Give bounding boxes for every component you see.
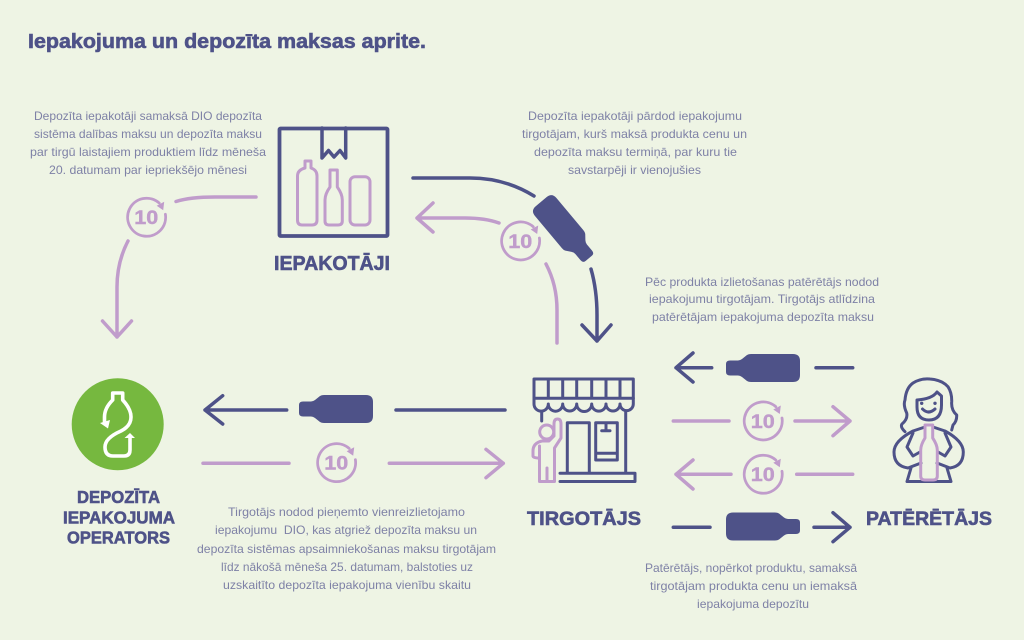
text block: consumer buys product: iepakojuma depozītu [697, 598, 809, 611]
text block: retailer hands packaging to DIO [197, 506, 496, 592]
text block: packers pay DIO: 20. datumam par iepriekšējo mēnesi [49, 164, 247, 177]
icon: retailer shop [533, 379, 635, 482]
icon: DIO green recycle bottle [72, 378, 164, 470]
icon: deposit 10 consumer to retailer: 10 [751, 465, 775, 486]
heading: consumer: PATĒRĒTĀJS [866, 508, 992, 530]
text block: retailer hands packaging to DIO: depozīta sistēmas apsaimniekošanas maksu tirgotājam [197, 543, 496, 556]
text block: consumer returns packaging: Pēc produkta izlietošanas patērētājs nodod [645, 276, 879, 289]
arrow: packers to DIO [102, 197, 256, 337]
text block: retailer hands packaging to DIO: līdz nākošā mēneša 25. datumam, balstoties uz [221, 561, 473, 574]
icon: bottle diagonal [530, 193, 600, 267]
text block: consumer returns packaging: patērētājam iepakojuma depozīta maksu [652, 311, 874, 324]
arrow: deposit from DIO to retailer [203, 449, 503, 478]
icon: deposit 10 consumer to retailer [744, 455, 782, 493]
icon: deposit 10 retailer to packers: 10 [508, 232, 532, 253]
text block: retailer hands packaging to DIO: Tirgotājs nodod pieņemto vienreizlietojamo [228, 506, 465, 519]
icon: deposit 10 packers to DIO [128, 198, 166, 236]
text block: consumer buys product [645, 562, 858, 611]
arrow row: deposit retailer to consumer [673, 407, 850, 436]
text block: packers sell to retailer: depozīta maksu termiņā, par kuru tie [534, 146, 737, 159]
arrow row: deposit consumer to retailer [676, 460, 853, 489]
icon: deposit 10 DIO to retailer: 10 [324, 454, 348, 475]
text block: packers sell to retailer: Depozīta iepakotāji pārdod iepakojumu [528, 110, 742, 123]
arrow row: bottle consumer to retailer [676, 353, 853, 382]
text block: packers sell to retailer: tirgotājam, kurš maksā produkta cenu un [522, 128, 747, 141]
arrow: deposit from retailer to packers [417, 203, 557, 343]
title: Iepakojuma un depozīta maksas aprite. [28, 31, 426, 53]
text block: retailer hands packaging to DIO: uzskaitīto depozīta iepakojuma vienību skaitu [223, 579, 471, 592]
arrow: bottle from retailer to DIO [205, 395, 505, 424]
icon: deposit 10 retailer to consumer [744, 402, 782, 440]
heading: packers: IEPAKOTĀJI [274, 252, 390, 275]
text block: packers pay DIO: sistēma dalības maksu un depozīta maksu [34, 128, 262, 141]
text block: retailer hands packaging to DIO: iepakojumu DIO, kas atgriež depozīta maksu un [215, 524, 477, 537]
text block: packers sell to retailer: savstarpēji ir vienojušies [568, 164, 701, 177]
text block: packers sell to retailer [522, 110, 747, 177]
icon: deposit 10 packers to DIO: 10 [134, 208, 158, 229]
icon: deposit 10 retailer to packers [502, 222, 540, 260]
icon: packers box [280, 128, 388, 236]
text block: packers pay DIO: Depozīta iepakotāji samaksā DIO depozīta [34, 110, 263, 123]
text block: consumer buys product: Patērētājs, nopērkot produktu, samaksā [645, 562, 858, 575]
icon: deposit 10 DIO to retailer [318, 444, 356, 482]
heading: retailer: TIRGOTĀJS [527, 508, 641, 530]
heading: DIO operator: IEPAKOJUMA [63, 508, 175, 528]
icon: consumer woman with bottle [894, 379, 963, 482]
text block: consumer returns packaging: iepakojumu tirgotājam. Tirgotājs atlīdzina [649, 293, 876, 306]
text block: consumer returns packaging [645, 276, 879, 324]
icon: deposit 10 retailer to consumer: 10 [751, 412, 775, 433]
arrow: bottle from packers to retailer [413, 178, 611, 341]
heading: DIO operator: DEPOZĪTA [77, 487, 160, 507]
arrow row: bottle retailer to consumer [673, 512, 850, 542]
text block: packers pay DIO: par tirgū laistajiem produktiem līdz mēneša [30, 146, 267, 159]
heading: DIO operator [63, 487, 175, 548]
heading: DIO operator: OPERATORS [67, 528, 170, 548]
text block: packers pay DIO [30, 110, 267, 177]
text block: consumer buys product: tirgotājam produkta cenu un iemaksā [650, 580, 858, 593]
